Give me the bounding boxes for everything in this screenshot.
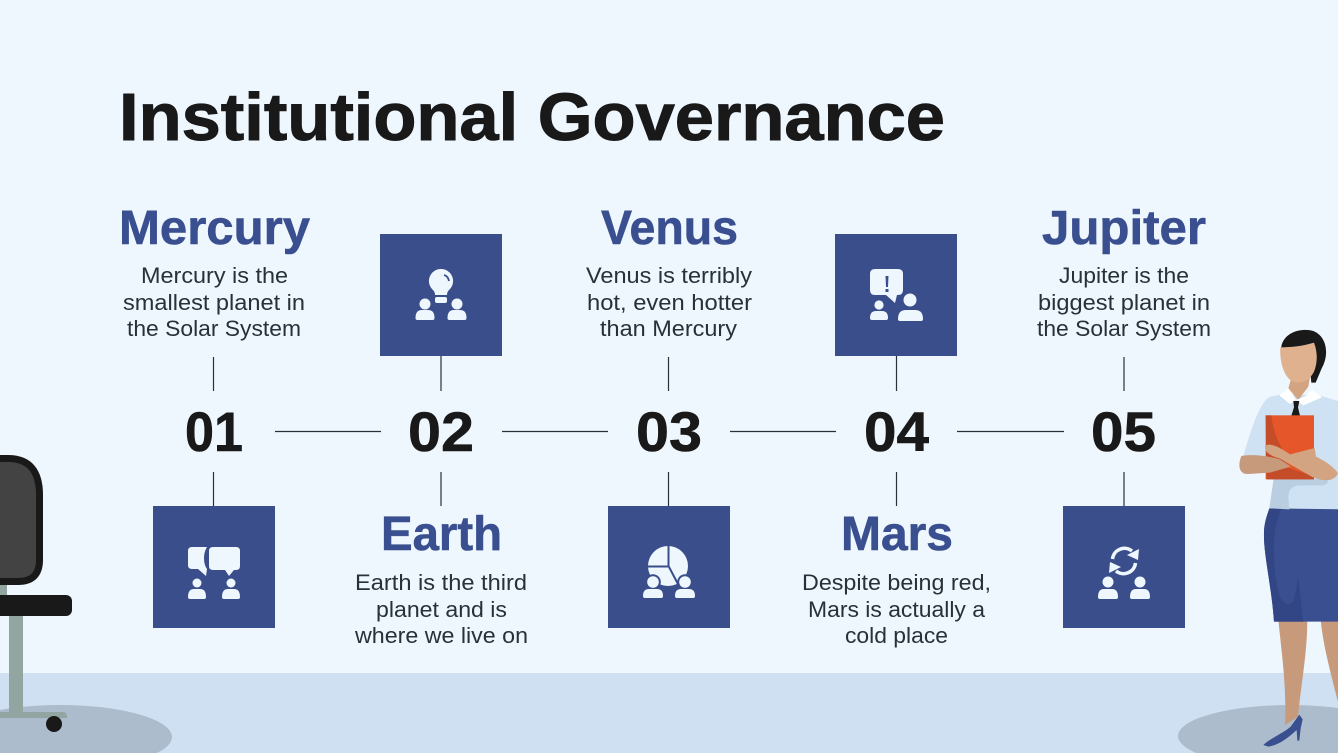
step 01: Mercury (119, 202, 310, 628)
skirt (1264, 508, 1338, 622)
step 02: Earth (354, 234, 528, 648)
text: Earth description: Earth is the third (355, 570, 527, 595)
number 01: 01 (185, 400, 243, 463)
text: Mercury description: Mercury is the (141, 263, 288, 288)
number 05: 05 (1091, 400, 1156, 463)
text: Jupiter description (1037, 263, 1211, 341)
notebook (1266, 415, 1314, 479)
text: Mercury description: the Solar System (127, 316, 301, 341)
shoe (1263, 715, 1303, 747)
illustration: woman holding a notebook (1239, 330, 1338, 747)
text: Mercury description (123, 263, 305, 341)
text: Venus description: hot, even hotter (587, 290, 753, 315)
text: Jupiter description: the Solar System (1037, 316, 1211, 341)
illustration: office chair (0, 458, 72, 732)
icon box: lightbulb (380, 234, 502, 356)
shadow ellipse: left (0, 705, 172, 753)
icon box: refresh cycle (1063, 506, 1185, 628)
number 04: 04 (864, 400, 929, 463)
text: Mars description: Mars is actually a (808, 597, 985, 622)
heading: Venus: Venus (601, 202, 738, 255)
text: Earth description (354, 570, 528, 648)
hair (1281, 330, 1326, 383)
icon box: pie chart (608, 506, 730, 628)
text: Venus description: than Mercury (600, 316, 738, 341)
step 03: Venus (586, 202, 753, 628)
icon box: speech bubbles (153, 506, 275, 628)
tie (1291, 401, 1300, 416)
heading: Jupiter: Jupiter (1042, 202, 1206, 255)
text: Venus description (586, 263, 753, 341)
blouse (1242, 394, 1338, 509)
text: Mars description: Despite being red, (802, 570, 991, 595)
floor band (0, 673, 1338, 753)
heading: Mercury: Mercury (119, 202, 310, 255)
number 02: 02 (408, 400, 474, 463)
heading: Earth: Earth (381, 508, 502, 561)
text: Earth description: planet and is (376, 597, 507, 622)
text: Jupiter description: biggest planet in (1038, 290, 1210, 315)
step 05: Jupiter (1037, 202, 1211, 628)
shadow ellipse: right (1178, 705, 1338, 753)
heading: Mars: Mars (841, 508, 953, 561)
title: Institutional Governance (119, 80, 945, 155)
icon box: alert bubble (835, 234, 957, 356)
collar (1279, 388, 1322, 405)
exclamation mark (886, 276, 888, 292)
text: Earth description: where we live on (354, 623, 528, 648)
legs (1278, 620, 1307, 725)
step 04: Mars (802, 234, 991, 648)
arms (1239, 455, 1291, 474)
timeline connector lines (214, 356, 1124, 506)
text: Jupiter description: Jupiter is the (1059, 263, 1189, 288)
text: Mars description: cold place (845, 623, 948, 648)
text: Mercury description: smallest planet in (123, 290, 305, 315)
text: Mars description (802, 570, 991, 648)
neck and face (1288, 377, 1310, 400)
text: Venus description: Venus is terribly (586, 263, 753, 288)
number 03: 03 (636, 400, 702, 463)
